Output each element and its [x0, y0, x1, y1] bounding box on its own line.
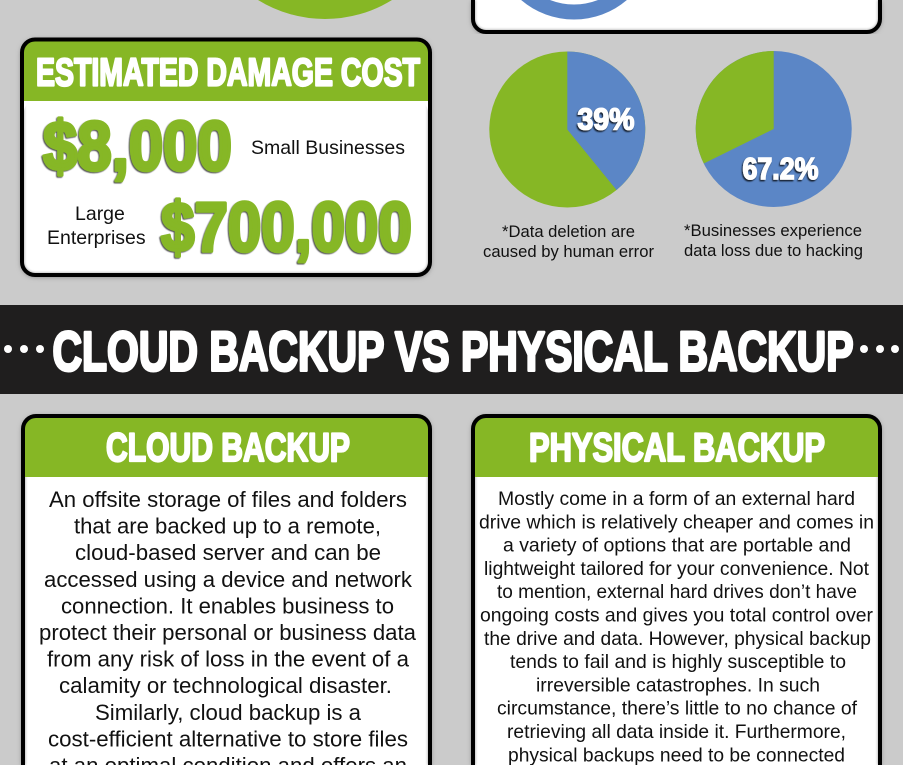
body text: physical backup: a variety of options that are portable and [503, 535, 851, 557]
icon: blue ring cut off at top [521, 0, 627, 20]
caption: hacking [684, 222, 863, 260]
stat: $8,000: $8,000 [43, 107, 232, 185]
body text: cloud backup: accessed using a device and network [44, 567, 413, 592]
body text: physical backup: the drive and data. However, physical backup [484, 628, 871, 650]
body text: cloud backup: Similarly, cloud backup is a [95, 700, 362, 725]
body text: physical backup: ongoing costs and gives you total control over [480, 604, 874, 626]
heading: cloud backup: CLOUD BACKUP [106, 426, 350, 470]
label: small businesses: Small Businesses [251, 137, 405, 159]
caption: hacking: data loss due to hacking [684, 242, 863, 260]
body text: physical backup: circumstance, there’s little to no chance of [497, 698, 858, 720]
body text: physical backup: tends to fail and is highly susceptible to [510, 651, 846, 673]
header bar [473, 416, 880, 477]
body text: cloud backup [39, 487, 417, 765]
caption: human error: *Data deletion are [502, 223, 635, 241]
chart: pie 39 percent [489, 52, 645, 208]
panel: physical backup [473, 416, 880, 765]
body text: cloud backup: connection. It enables business to [61, 593, 394, 618]
body text: cloud backup: cost-efficient alternative to store files [48, 726, 408, 751]
body text: cloud backup: from any risk of loss in the event of a [47, 647, 410, 672]
stat: $700,000: $700,000 [161, 188, 412, 266]
heading: estimated damage cost: ESTIMATED DAMAGE COST [36, 52, 420, 94]
header bar [23, 416, 430, 477]
body text: cloud backup: protect their personal or business data [39, 620, 417, 645]
value: 67.2%: 67.2% [742, 151, 818, 186]
label: large enterprises: Large [75, 203, 125, 225]
body text: physical backup: lightweight tailored for your convenience. Not [484, 558, 870, 580]
body text: cloud backup: An offsite storage of files and folders [49, 487, 407, 512]
panel: top right card remainder [473, 0, 880, 32]
body text: physical backup: Mostly come in a form of an external hard [498, 488, 855, 510]
header bar [22, 40, 430, 101]
body text: physical backup: retrieving all data inside it. Furthermore, [507, 721, 846, 743]
panel: cloud backup [23, 416, 430, 765]
caption: human error: caused by human error [483, 243, 654, 261]
body text: physical backup: to mention, external hard drives don’t have [497, 581, 857, 603]
body text: physical backup: drive which is relatively cheaper and comes in [479, 511, 874, 533]
caption: hacking: *Businesses experience [684, 222, 862, 240]
banner: cloud backup vs physical backup [0, 305, 903, 394]
body text: cloud backup: calamity or technological disaster. [59, 673, 392, 698]
body text: cloud backup: that are backed up to a remote, [74, 514, 381, 539]
value: 39%: 39% [578, 102, 634, 136]
body text: cloud backup: cloud-based server and can be [75, 540, 381, 565]
heading: physical backup: PHYSICAL BACKUP [529, 426, 825, 470]
body text: physical backup [479, 488, 874, 765]
icon: green circle cut off at top [258, 0, 392, 19]
panel: estimated damage cost [22, 40, 430, 275]
body text: physical backup: irreversible catastrophes. In such [536, 674, 820, 696]
caption: human error [483, 223, 654, 261]
chart: pie 67.2 percent [696, 51, 852, 207]
label: large enterprises: Enterprises [47, 227, 146, 249]
